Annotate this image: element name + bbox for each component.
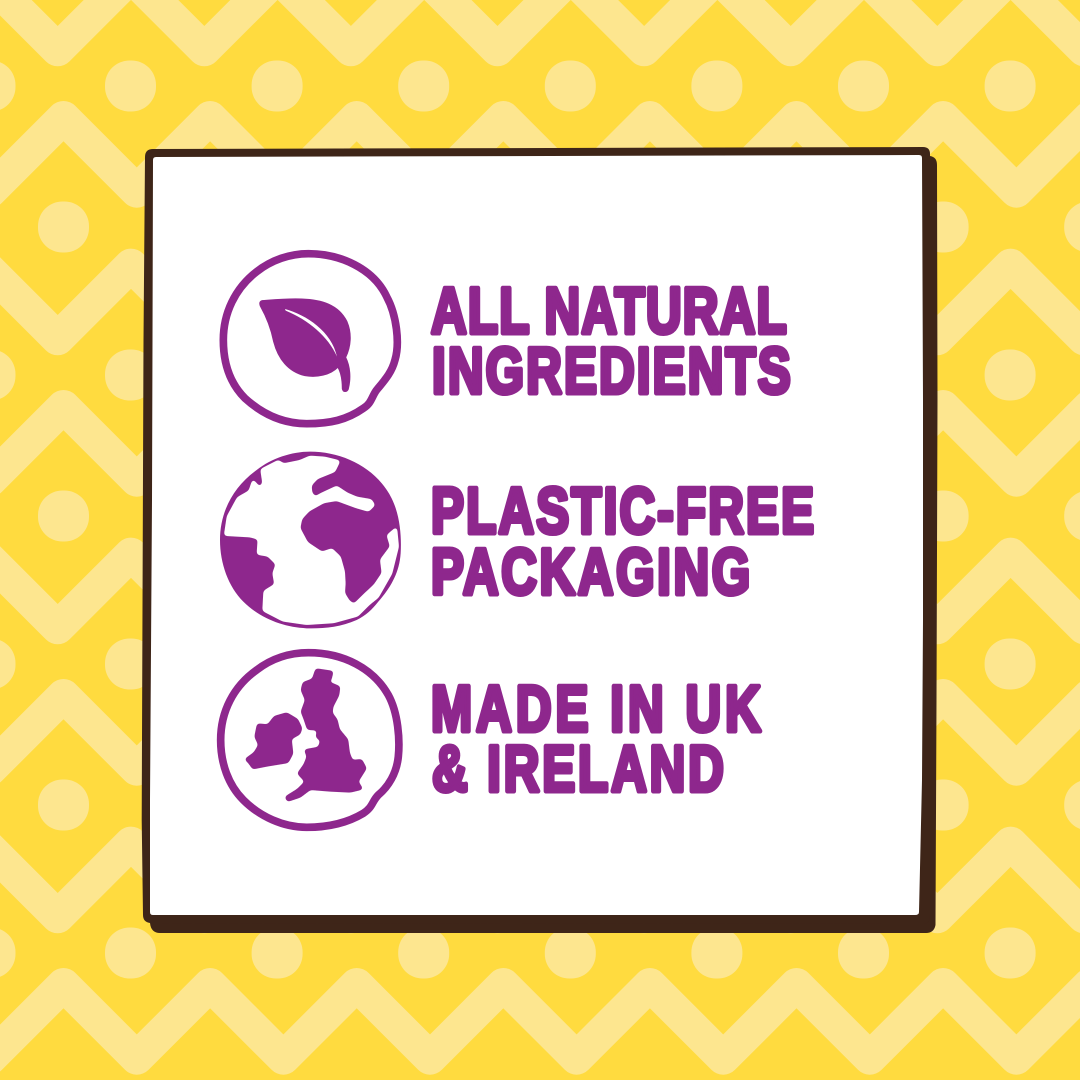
heading: all natural ingredients: INGREDIENTS (432, 336, 791, 408)
heading: plastic-free packaging: PACKAGING (431, 537, 750, 609)
heading: made in UK and Ireland (431, 674, 761, 806)
icon: UK and Ireland map in circle (221, 653, 399, 827)
icon: globe (220, 452, 401, 628)
heading: plastic-free packaging (431, 476, 814, 609)
heading: all natural ingredients (431, 276, 791, 408)
frame outline (142, 147, 930, 924)
heading: all natural ingredients: ALL NATURAL (431, 276, 787, 348)
heading: made in UK and Ireland: MADE IN UK (431, 674, 761, 746)
item: all natural ingredients (223, 254, 791, 424)
item: plastic-free packaging (220, 452, 814, 628)
card interior (150, 155, 923, 915)
heading: plastic-free packaging: PLASTIC-FREE (431, 476, 814, 548)
frame shadow (150, 156, 938, 933)
heading: made in UK and Ireland: & IRELAND (432, 734, 724, 806)
item: made in UK and Ireland (221, 653, 761, 827)
icon: leaf in circle (223, 254, 397, 424)
panel: white card with brown hand-drawn frame (142, 147, 937, 933)
